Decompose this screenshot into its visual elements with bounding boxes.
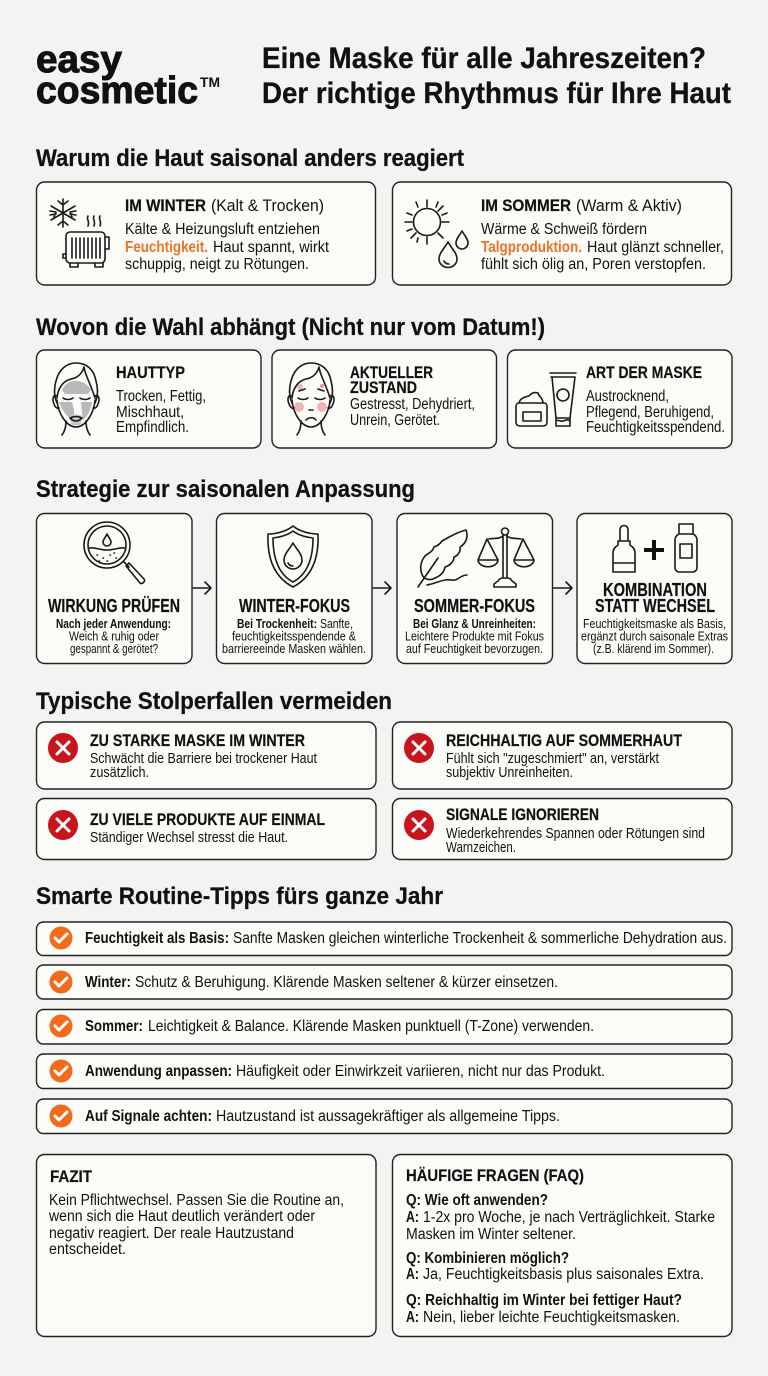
icon: face with mask <box>53 363 99 435</box>
heading: Smarte Routine-Tipps: Smarte Routine-Tipps fürs ganze Jahr <box>36 883 443 910</box>
title <box>262 42 731 110</box>
text: sommer-fokus: SOMMER-FOKUS <box>414 596 535 616</box>
text: winter-fokus: barriereeinde Masken wählen. <box>222 641 366 656</box>
text <box>446 805 705 856</box>
text: Wiederkehrendes Spannen oder Rötungen sind <box>446 826 705 842</box>
tip: Sommer: Sommer: <box>85 1018 143 1035</box>
panel: faq <box>392 1154 732 1336</box>
text: sommer: Haut glänzt schneller, <box>587 239 724 256</box>
text: winter: Haut spannt, wirkt <box>213 239 330 256</box>
heading: Typische Stolperfallen vermeiden: Typische Stolperfallen vermeiden <box>36 688 392 715</box>
tip: Sommer <box>36 1010 732 1044</box>
icon: magnifier over skin <box>84 522 145 584</box>
icon: dropper bottle plus bottle <box>613 524 697 572</box>
icon: shield with drop <box>268 526 318 587</box>
panel: wirkung prüfen <box>36 514 192 664</box>
panel: fazit: negativ reagiert. Der reale Hautzustand <box>49 1225 294 1242</box>
tip: Anwendung anpassen: Anwendung anpassen: <box>85 1063 232 1080</box>
text: kombination: STATT WECHSEL <box>595 596 715 616</box>
text: kombination <box>581 580 728 656</box>
text: kombination: KOMBINATION <box>603 580 707 600</box>
text: ZU VIELE PRODUKTE AUF EINMAL <box>90 810 325 829</box>
panel: aktueller zustand <box>272 350 496 448</box>
text: SIGNALE IGNORIEREN <box>446 805 599 824</box>
text: sommer: Talgproduktion. <box>481 239 582 256</box>
text: winter: Feuchtigkeit. <box>125 239 208 256</box>
text: wirkung prüfen: Nach jeder Anwendung: <box>56 616 171 631</box>
text: zusätzlich. <box>90 765 149 781</box>
text: sommer: fühlt sich ölig an, Poren verstopfen. <box>481 256 706 273</box>
text: winter-fokus: feuchtigkeitsspendende & <box>232 628 356 644</box>
heading: Warum die Haut saisonal anders reagiert: Warum die Haut saisonal anders reagiert <box>36 145 464 172</box>
tip: Winter <box>36 965 732 999</box>
panel: faq: Q: Reichhaltig im Winter bei fettiger Haut? <box>406 1292 682 1309</box>
text <box>446 731 683 781</box>
panel: faq: A: <box>406 1209 419 1226</box>
text: aktueller zustand: ZUSTAND <box>350 378 417 397</box>
text: winter: (Kalt & Trocken) <box>211 196 324 215</box>
panel: im sommer <box>392 182 732 285</box>
panel: im winter <box>36 182 376 285</box>
text: winter: IM WINTER <box>125 196 206 215</box>
text: kombination: ergänzt durch saisonale Extras <box>581 628 728 644</box>
panel: faq: Nein, lieber leichte Feuchtigkeitsmasken. <box>423 1309 680 1326</box>
icon: irritated face <box>288 363 334 435</box>
logo: easy cosmetic: easy <box>36 39 122 81</box>
text: sommer <box>481 196 724 273</box>
text: aktueller zustand <box>350 363 475 429</box>
arrow: step 1 to 2 <box>193 582 211 594</box>
text: hauttyp: HAUTTYP <box>116 363 185 382</box>
text: kombination: (z.B. klärend im Sommer). <box>593 641 714 656</box>
tip: Feuchtigkeit als Basis: Feuchtigkeit als Basis: <box>85 930 229 947</box>
panel: fazit: wenn sich die Haut deutlich verändert oder <box>48 1208 315 1225</box>
panel: faq: 1-2x pro Woche, je nach Verträglichkeit. Starke <box>423 1209 715 1226</box>
text: wirkung prüfen: WIRKUNG PRÜFEN <box>48 596 180 616</box>
panel: faq: Q: Kombinieren möglich? <box>406 1250 569 1267</box>
panel: zu viele produkte <box>36 798 376 860</box>
icon: feather and scale <box>418 528 534 587</box>
arrow: step 3 to 4 <box>553 582 572 594</box>
text: winter-fokus: Bei Trockenheit: <box>237 616 317 631</box>
text: art der maske: Pflegend, Beruhigend, <box>586 404 714 421</box>
text: art der maske: Austrocknend, <box>586 388 669 405</box>
panel: fazit: Kein Pflichtwechsel. Passen Sie die Routine an, <box>49 1192 344 1209</box>
tip: Winter: Winter: <box>85 974 131 991</box>
text <box>90 731 317 781</box>
text: winter-fokus: WINTER-FOKUS <box>239 596 350 616</box>
panel: fazit <box>36 1154 376 1336</box>
panel: fazit: entscheidet. <box>49 1241 126 1258</box>
text: art der maske: ART DER MASKE <box>586 363 702 382</box>
text: winter-fokus: Sanfte, <box>320 616 353 631</box>
panel: signale ignorieren <box>392 798 732 860</box>
heading: Strategie zur saisonalen Anpassung: Strategie zur saisonalen Anpassung <box>36 476 415 503</box>
text: Fühlt sich "zugeschmiert" an, verstärkt <box>446 751 659 767</box>
panel: sommer-fokus <box>397 514 552 664</box>
text: art der maske <box>586 363 725 436</box>
text <box>90 810 325 846</box>
panel: faq: A: <box>406 1266 419 1283</box>
text: aktueller zustand: AKTUELLER <box>350 363 433 382</box>
icon: sun and drops <box>405 200 468 268</box>
text: REICHHALTIG AUF SOMMERHAUT <box>446 731 683 750</box>
tip: Auf Signale achten: Hautzustand ist aussagekräftiger als allgemeine Tipps. <box>216 1108 560 1125</box>
text: winter: schuppig, neigt zu Rötungen. <box>125 256 309 273</box>
panel: faq: Ja, Feuchtigkeitsbasis plus saisonales Extra. <box>423 1266 704 1283</box>
tip: Auf Signale achten: Auf Signale achten: <box>85 1108 212 1125</box>
panel: art der maske <box>508 350 732 448</box>
panel: hauttyp <box>36 350 261 448</box>
panel: faq: Q: Wie oft anwenden? <box>406 1192 548 1209</box>
text: sommer-fokus <box>405 596 544 656</box>
panel: reichhaltig <box>392 722 732 789</box>
icon: red x <box>48 810 78 840</box>
icon: red x <box>404 733 434 763</box>
panel: fazit: FAZIT <box>50 1167 93 1186</box>
text: subjektiv Unreinheiten. <box>446 765 573 781</box>
heading: Wovon die Wahl abhängt: Wovon die Wahl abhängt (Nicht nur vom Datum!) <box>36 314 545 341</box>
text: Warnzeichen. <box>446 840 516 856</box>
text: winter-fokus <box>222 596 366 656</box>
text: hauttyp: Trocken, Fettig, <box>116 388 206 405</box>
text: winter: Kälte & Heizungsluft entziehen <box>125 221 320 238</box>
tip: Feuchtigkeit als Basis <box>36 922 732 956</box>
tip: Winter: Schutz & Beruhigung. Klärende Masken seltener & kürzer einsetzen. <box>135 974 558 991</box>
tip: Anwendung anpassen <box>36 1054 732 1088</box>
panel: faq: A: <box>406 1309 419 1326</box>
text: ZU STARKE MASKE IM WINTER <box>90 731 305 750</box>
text: kombination: Feuchtigkeitsmaske als Basis, <box>583 616 726 631</box>
text: aktueller zustand: Gestresst, Dehydriert, <box>350 396 475 413</box>
panel: zu starke maske <box>36 722 376 789</box>
tip: Auf Signale achten <box>36 1099 732 1134</box>
title: Eine Maske für alle Jahreszeiten? <box>262 42 706 75</box>
text: sommer: IM SOMMER <box>481 196 571 215</box>
text: aktueller zustand: Unrein, Gerötet. <box>350 412 440 429</box>
text: sommer: (Warm & Aktiv) <box>576 196 682 215</box>
text: winter <box>125 196 330 273</box>
logo: easy cosmetic <box>36 39 220 112</box>
text: wirkung prüfen <box>48 596 180 656</box>
text: sommer-fokus: Leichtere Produkte mit Fokus <box>405 628 544 644</box>
panel: faq: HÄUFIGE FRAGEN (FAQ) <box>406 1166 584 1185</box>
icon: red x <box>404 810 434 840</box>
title: Der richtige Rhythmus für Ihre Haut <box>262 77 731 110</box>
text: hauttyp <box>116 363 206 436</box>
panel: kombination statt wechsel <box>577 514 732 664</box>
text: art der maske: Feuchtigkeitsspendend. <box>586 419 725 436</box>
logo: easy cosmetic: TM <box>200 74 220 90</box>
icon: red x <box>48 733 78 763</box>
text: wirkung prüfen: Weich & ruhig oder <box>69 628 160 644</box>
icon: jar and tube <box>516 373 576 426</box>
text: sommer-fokus: auf Feuchtigkeit bevorzugen. <box>406 641 543 656</box>
arrow: step 2 to 3 <box>373 582 391 594</box>
logo: easy cosmetic: cosmetic <box>36 70 198 112</box>
tip: Sommer: Leichtigkeit & Balance. Klärende Masken punktuell (T-Zone) verwenden. <box>148 1018 594 1035</box>
text: Schwächt die Barriere bei trockener Haut <box>90 751 317 767</box>
text: wirkung prüfen: gespannt & gerötet? <box>70 641 158 656</box>
icon: snowflake and radiator <box>50 199 109 267</box>
text: hauttyp: Empfindlich. <box>116 419 189 436</box>
tip: Anwendung anpassen: Häufigkeit oder Einwirkzeit variieren, nicht nur das Produkt. <box>236 1063 605 1080</box>
text: hauttyp: Mischhaut, <box>116 404 184 421</box>
text: Ständiger Wechsel stresst die Haut. <box>90 830 288 846</box>
text: sommer: Wärme & Schweiß fördern <box>481 221 647 238</box>
panel: winter-fokus <box>216 514 372 664</box>
text: sommer-fokus: Bei Glanz & Unreinheiten: <box>413 616 536 631</box>
panel: faq: Masken im Winter seltener. <box>406 1226 576 1243</box>
